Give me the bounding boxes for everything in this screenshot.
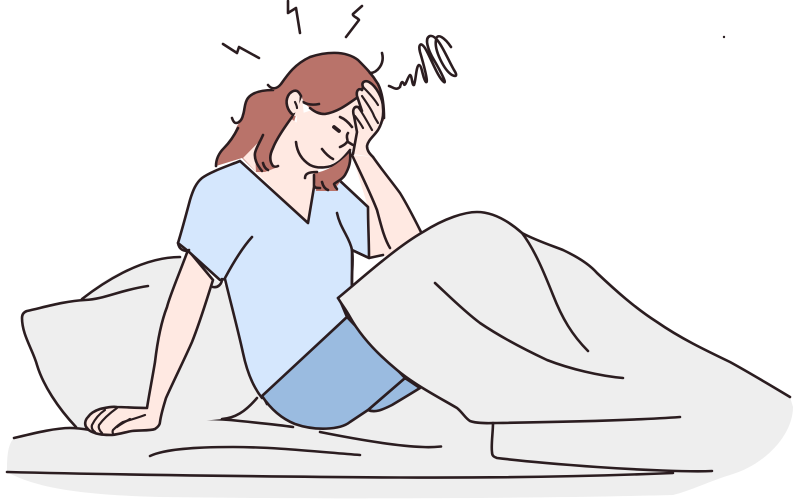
- stress mark: lightning left: [223, 44, 259, 58]
- stress mark: scribble spring: [389, 36, 456, 89]
- arm: supporting arm and hand: [85, 250, 213, 435]
- shirt: light blue top: [178, 161, 383, 404]
- stress mark: lightning right: [346, 6, 362, 37]
- hand on head: [353, 81, 383, 157]
- speck: [723, 36, 725, 38]
- stress mark: lightning centre: [288, 1, 300, 33]
- back hair: [216, 85, 300, 172]
- right arm: [352, 155, 421, 258]
- neck: [243, 115, 340, 223]
- blanket: [338, 212, 790, 471]
- hair: top of head: [268, 53, 384, 122]
- pants: blue shorts: [262, 317, 420, 429]
- head: face: [296, 95, 372, 170]
- ear: [287, 91, 304, 116]
- pillow: [22, 257, 257, 427]
- bed base: [7, 350, 793, 498]
- hair: side locks: [255, 105, 350, 191]
